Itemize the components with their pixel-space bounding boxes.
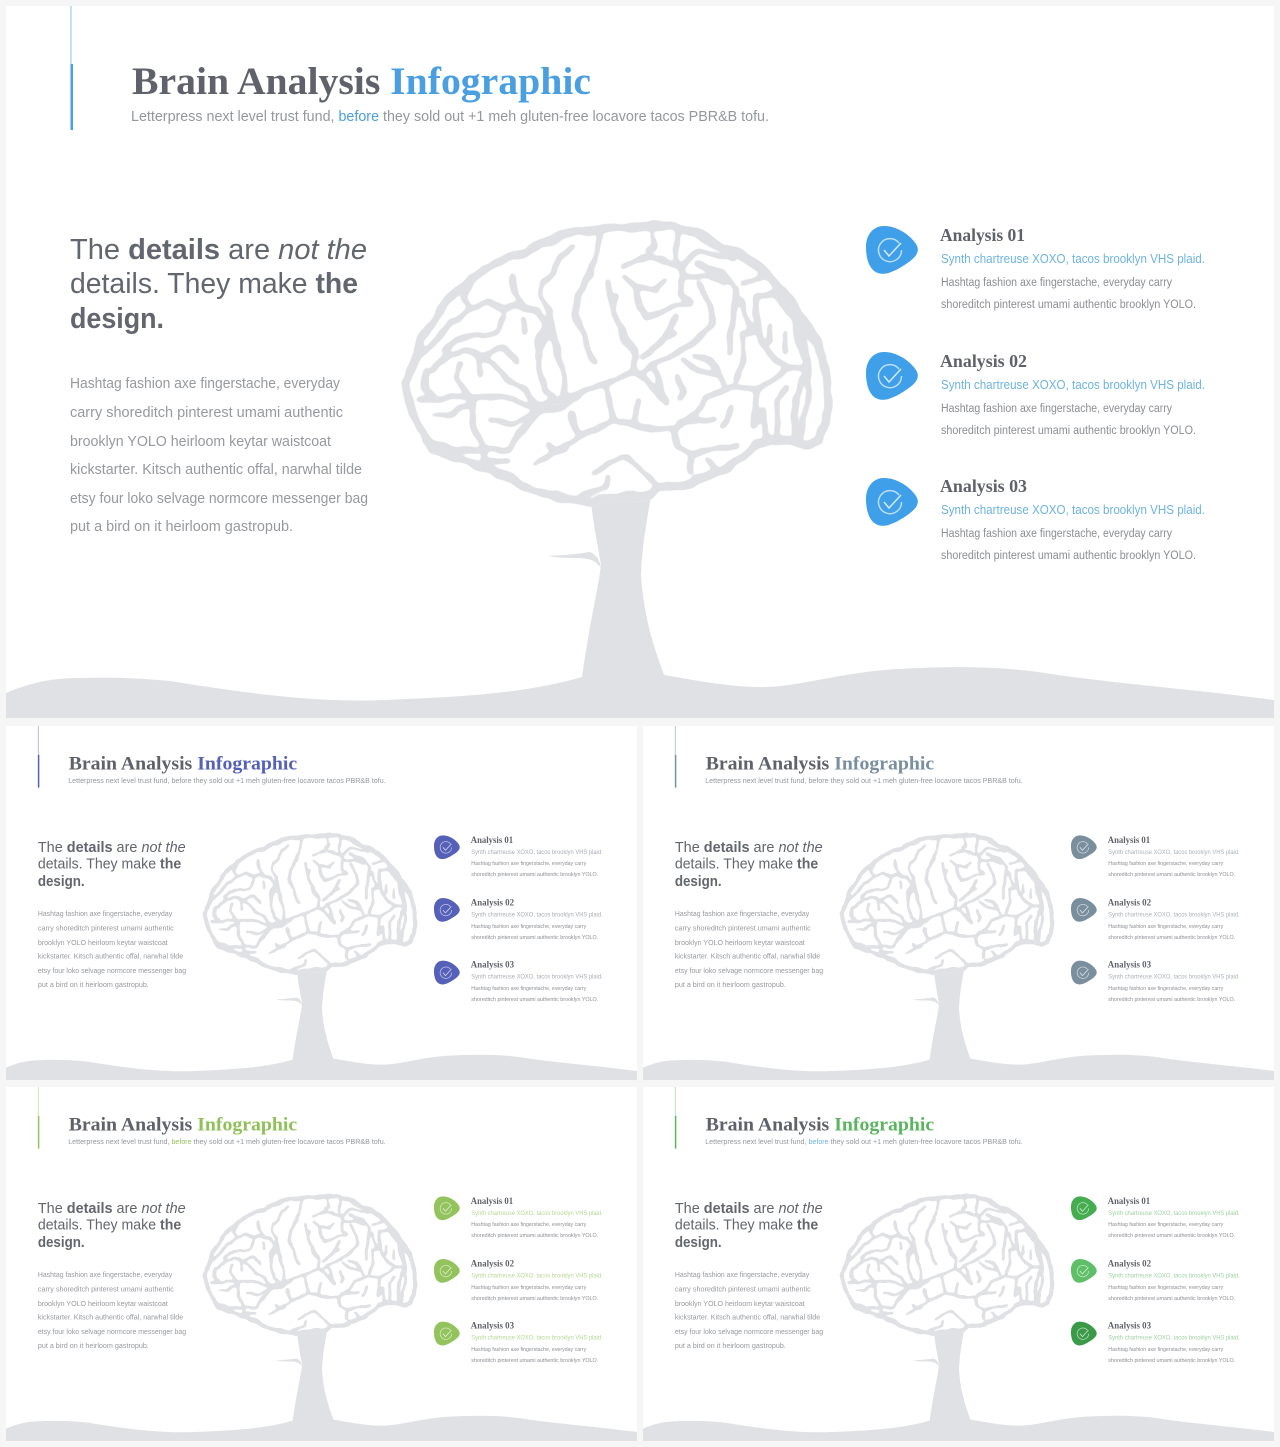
item: analysis 03: shoreditch pinterest umami authentic brooklyn YOLO. — [471, 1358, 599, 1364]
item: analysis 01: shoreditch pinterest umami authentic brooklyn YOLO. — [1108, 1233, 1236, 1239]
panel: lime slide — [6, 1087, 637, 1441]
illustration: brain tree on ground — [643, 835, 1274, 1080]
heading: the details: design. — [38, 1235, 85, 1251]
body paragraph: carry shoreditch pinterest umami authentic — [675, 923, 811, 932]
item: analysis 03: Hashtag fashion axe fingerstache, everyday carry — [941, 528, 1172, 540]
item: analysis 01 — [866, 225, 1205, 311]
item: analysis 01: Analysis 01 — [1108, 835, 1150, 845]
heading: the details — [38, 840, 186, 890]
body paragraph: carry shoreditch pinterest umami authentic — [675, 1284, 811, 1293]
heading: the details: details. They make the — [38, 857, 181, 873]
item: analysis 01: Analysis 01 — [940, 225, 1025, 245]
body paragraph: Hashtag fashion axe fingerstache, everyday — [675, 909, 810, 918]
item: analysis 02: shoreditch pinterest umami authentic brooklyn YOLO. — [1108, 935, 1236, 941]
item: analysis 03: Hashtag fashion axe fingerstache, everyday carry — [471, 986, 586, 992]
illustration: brain tree on ground — [643, 1196, 1274, 1441]
item: analysis 02: shoreditch pinterest umami authentic brooklyn YOLO. — [941, 425, 1196, 437]
panel: steel slide — [643, 726, 1274, 1080]
panel: green slide — [643, 1087, 1274, 1441]
item: analysis 01 — [434, 835, 603, 878]
item: analysis 03: Analysis 03 — [940, 476, 1027, 496]
heading: the details — [38, 1201, 186, 1251]
subtitle: Letterpress next level trust fund, before they sold out +1 meh gluten-free locavore tacos PBR&B tofu. — [131, 109, 769, 125]
item: analysis 03 — [1071, 960, 1240, 1003]
heading: the details: details. They make the — [70, 268, 358, 300]
item: analysis 03 — [434, 1321, 603, 1364]
title: Brain Analysis Infographic — [706, 754, 935, 775]
title: Brain Analysis Infographic — [69, 754, 298, 775]
illustration: brain tree on ground — [6, 1196, 637, 1441]
heading: the details: design. — [675, 874, 722, 890]
item: analysis 03: shoreditch pinterest umami authentic brooklyn YOLO. — [471, 997, 599, 1003]
subtitle: Letterpress next level trust fund, before they sold out +1 meh gluten-free locavore tacos PBR&B tofu. — [68, 1137, 386, 1146]
item: analysis 02: Analysis 02 — [471, 1258, 515, 1268]
heading: the details — [675, 840, 823, 890]
item: analysis 03: Synth chartreuse XOXO, tacos brooklyn VHS plaid. — [1108, 1335, 1240, 1342]
body paragraph — [70, 376, 368, 535]
body paragraph: etsy four loko selvage normcore messenger bag — [38, 966, 186, 975]
heading: the details — [70, 234, 367, 335]
item: analysis 02: Analysis 02 — [471, 897, 515, 907]
item: analysis 02: Synth chartreuse XOXO, tacos brooklyn VHS plaid. — [1108, 1272, 1240, 1279]
body paragraph: put a bird on it heirloom gastropub. — [38, 1341, 149, 1350]
item: analysis 02: Hashtag fashion axe fingerstache, everyday carry — [471, 1285, 586, 1291]
item: analysis 03: Analysis 03 — [471, 960, 515, 970]
item: analysis 01: Hashtag fashion axe fingerstache, everyday carry — [471, 861, 586, 867]
item: analysis 02: shoreditch pinterest umami authentic brooklyn YOLO. — [471, 1296, 599, 1302]
item: analysis 02: Synth chartreuse XOXO, tacos brooklyn VHS plaid. — [941, 378, 1205, 392]
item: analysis 03: shoreditch pinterest umami authentic brooklyn YOLO. — [1108, 997, 1236, 1003]
body paragraph: carry shoreditch pinterest umami authentic — [38, 923, 174, 932]
title: Brain Analysis Infographic — [706, 1115, 935, 1136]
heading: the details: The details are not the — [675, 840, 823, 856]
item: analysis 03: shoreditch pinterest umami authentic brooklyn YOLO. — [1108, 1358, 1236, 1364]
body paragraph: etsy four loko selvage normcore messenger bag — [675, 1327, 823, 1336]
heading: the details: design. — [70, 303, 164, 335]
item: analysis 01: Hashtag fashion axe fingerstache, everyday carry — [1108, 1222, 1223, 1228]
item: analysis 01: Synth chartreuse XOXO, tacos brooklyn VHS plaid. — [941, 252, 1205, 266]
item: analysis 03: Analysis 03 — [471, 1321, 515, 1331]
item: analysis 02: Hashtag fashion axe fingerstache, everyday carry — [1108, 1285, 1223, 1291]
subtitle: Letterpress next level trust fund, before they sold out +1 meh gluten-free locavore tacos PBR&B tofu. — [705, 776, 1023, 785]
item: analysis 02: Synth chartreuse XOXO, tacos brooklyn VHS plaid. — [471, 1272, 603, 1279]
item: analysis 02: Hashtag fashion axe fingerstache, everyday carry — [471, 924, 586, 930]
item: analysis 01: Analysis 01 — [1108, 1196, 1150, 1206]
body paragraph: Hashtag fashion axe fingerstache, everyday — [38, 1270, 173, 1279]
body paragraph: kickstarter. Kitsch authentic offal, narwhal tilde — [38, 1313, 183, 1322]
item: analysis 03: shoreditch pinterest umami authentic brooklyn YOLO. — [941, 550, 1196, 562]
item: analysis 02: Analysis 02 — [940, 351, 1027, 371]
item: analysis 02 — [434, 1258, 603, 1302]
item: analysis 03 — [1071, 1321, 1240, 1364]
body paragraph: brooklyn YOLO heirloom keytar waistcoat — [38, 1299, 168, 1308]
item: analysis 02: shoreditch pinterest umami authentic brooklyn YOLO. — [1108, 1296, 1236, 1302]
body paragraph — [675, 909, 823, 989]
body paragraph: etsy four loko selvage normcore messenger bag — [38, 1327, 186, 1336]
item: analysis 01: Analysis 01 — [471, 1196, 513, 1206]
heading: the details: details. They make the — [675, 857, 818, 873]
heading: the details: details. They make the — [675, 1218, 818, 1234]
accent line — [675, 726, 676, 788]
accent line — [70, 6, 73, 130]
heading: the details: design. — [675, 1235, 722, 1251]
accent line — [675, 1087, 676, 1149]
item: analysis 02 — [866, 351, 1205, 437]
body paragraph: etsy four loko selvage normcore messenger bag — [70, 491, 368, 507]
heading: the details: design. — [38, 874, 85, 890]
item: analysis 01: Synth chartreuse XOXO, tacos brooklyn VHS plaid. — [471, 849, 603, 856]
body paragraph: put a bird on it heirloom gastropub. — [675, 1341, 786, 1350]
item: analysis 02 — [1071, 897, 1240, 941]
accent line — [38, 726, 39, 788]
item: analysis 03: Analysis 03 — [1108, 1321, 1152, 1331]
item: analysis 03: Synth chartreuse XOXO, tacos brooklyn VHS plaid. — [471, 974, 603, 981]
body paragraph: carry shoreditch pinterest umami authentic — [70, 405, 343, 421]
heading: the details: The details are not the — [38, 840, 186, 856]
item: analysis 03: Analysis 03 — [1108, 960, 1152, 970]
illustration: brain tree on ground — [6, 225, 1274, 718]
item: analysis 02: shoreditch pinterest umami authentic brooklyn YOLO. — [471, 935, 599, 941]
heading: the details: The details are not the — [675, 1201, 823, 1217]
body paragraph: kickstarter. Kitsch authentic offal, narwhal tilde — [70, 462, 362, 478]
item: analysis 03: Hashtag fashion axe fingerstache, everyday carry — [1108, 1347, 1223, 1353]
item: analysis 01: Hashtag fashion axe fingerstache, everyday carry — [471, 1222, 586, 1228]
item: analysis 03: Synth chartreuse XOXO, tacos brooklyn VHS plaid. — [1108, 974, 1240, 981]
body paragraph: kickstarter. Kitsch authentic offal, narwhal tilde — [675, 952, 820, 961]
item: analysis 02 — [1071, 1258, 1240, 1302]
item: analysis 01: shoreditch pinterest umami authentic brooklyn YOLO. — [471, 872, 599, 878]
heading: the details: The details are not the — [70, 234, 367, 266]
item: analysis 03: Synth chartreuse XOXO, tacos brooklyn VHS plaid. — [471, 1335, 603, 1342]
item: analysis 02: Analysis 02 — [1108, 1258, 1152, 1268]
item: analysis 03 — [866, 476, 1205, 562]
item: analysis 03: Hashtag fashion axe fingerstache, everyday carry — [1108, 986, 1223, 992]
item: analysis 02: Synth chartreuse XOXO, tacos brooklyn VHS plaid. — [471, 911, 603, 918]
item: analysis 01: Synth chartreuse XOXO, tacos brooklyn VHS plaid. — [1108, 1210, 1240, 1217]
item: analysis 01 — [1071, 835, 1240, 878]
item: analysis 01 — [1071, 1196, 1240, 1239]
item: analysis 01: Analysis 01 — [471, 835, 513, 845]
heading: the details — [675, 1201, 823, 1251]
body paragraph: brooklyn YOLO heirloom keytar waistcoat — [675, 1299, 805, 1308]
item: analysis 03: Hashtag fashion axe fingerstache, everyday carry — [471, 1347, 586, 1353]
body paragraph: brooklyn YOLO heirloom keytar waistcoat — [675, 938, 805, 947]
item: analysis 01 — [434, 1196, 603, 1239]
title: Brain Analysis Infographic — [132, 60, 591, 103]
accent line — [38, 1087, 39, 1149]
subtitle: Letterpress next level trust fund, before they sold out +1 meh gluten-free locavore tacos PBR&B tofu. — [705, 1137, 1023, 1146]
body paragraph: Hashtag fashion axe fingerstache, everyday — [38, 909, 173, 918]
item: analysis 02: Hashtag fashion axe fingerstache, everyday carry — [941, 403, 1172, 415]
body paragraph: kickstarter. Kitsch authentic offal, narwhal tilde — [38, 952, 183, 961]
body paragraph: put a bird on it heirloom gastropub. — [675, 980, 786, 989]
item: analysis 01: Hashtag fashion axe fingerstache, everyday carry — [1108, 861, 1223, 867]
item: analysis 01: Synth chartreuse XOXO, tacos brooklyn VHS plaid. — [1108, 849, 1240, 856]
body paragraph: carry shoreditch pinterest umami authentic — [38, 1284, 174, 1293]
body paragraph — [675, 1270, 823, 1350]
illustration: brain tree on ground — [6, 835, 637, 1080]
subtitle: Letterpress next level trust fund, before they sold out +1 meh gluten-free locavore tacos PBR&B tofu. — [68, 776, 386, 785]
item: analysis 03 — [434, 960, 603, 1003]
body paragraph: kickstarter. Kitsch authentic offal, narwhal tilde — [675, 1313, 820, 1322]
body paragraph — [38, 1270, 186, 1350]
body paragraph: Hashtag fashion axe fingerstache, everyday — [675, 1270, 810, 1279]
item: analysis 03: Synth chartreuse XOXO, tacos brooklyn VHS plaid. — [941, 503, 1205, 517]
item: analysis 02: Analysis 02 — [1108, 897, 1152, 907]
title: Brain Analysis Infographic — [69, 1115, 298, 1136]
item: analysis 01: shoreditch pinterest umami authentic brooklyn YOLO. — [1108, 872, 1236, 878]
heading: the details: The details are not the — [38, 1201, 186, 1217]
body paragraph: brooklyn YOLO heirloom keytar waistcoat — [70, 434, 331, 450]
body paragraph: put a bird on it heirloom gastropub. — [38, 980, 149, 989]
panel: main blue slide — [6, 6, 1274, 718]
item: analysis 02: Hashtag fashion axe fingerstache, everyday carry — [1108, 924, 1223, 930]
item: analysis 02 — [434, 897, 603, 941]
body paragraph: put a bird on it heirloom gastropub. — [70, 519, 293, 535]
item: analysis 02: Synth chartreuse XOXO, tacos brooklyn VHS plaid. — [1108, 911, 1240, 918]
panel: indigo slide — [6, 726, 637, 1080]
body paragraph: Hashtag fashion axe fingerstache, everyday — [70, 376, 341, 392]
item: analysis 01: Hashtag fashion axe fingerstache, everyday carry — [941, 277, 1172, 289]
heading: the details: details. They make the — [38, 1218, 181, 1234]
item: analysis 01: shoreditch pinterest umami authentic brooklyn YOLO. — [941, 299, 1196, 311]
body paragraph — [38, 909, 186, 989]
body paragraph: brooklyn YOLO heirloom keytar waistcoat — [38, 938, 168, 947]
item: analysis 01: Synth chartreuse XOXO, tacos brooklyn VHS plaid. — [471, 1210, 603, 1217]
body paragraph: etsy four loko selvage normcore messenger bag — [675, 966, 823, 975]
item: analysis 01: shoreditch pinterest umami authentic brooklyn YOLO. — [471, 1233, 599, 1239]
